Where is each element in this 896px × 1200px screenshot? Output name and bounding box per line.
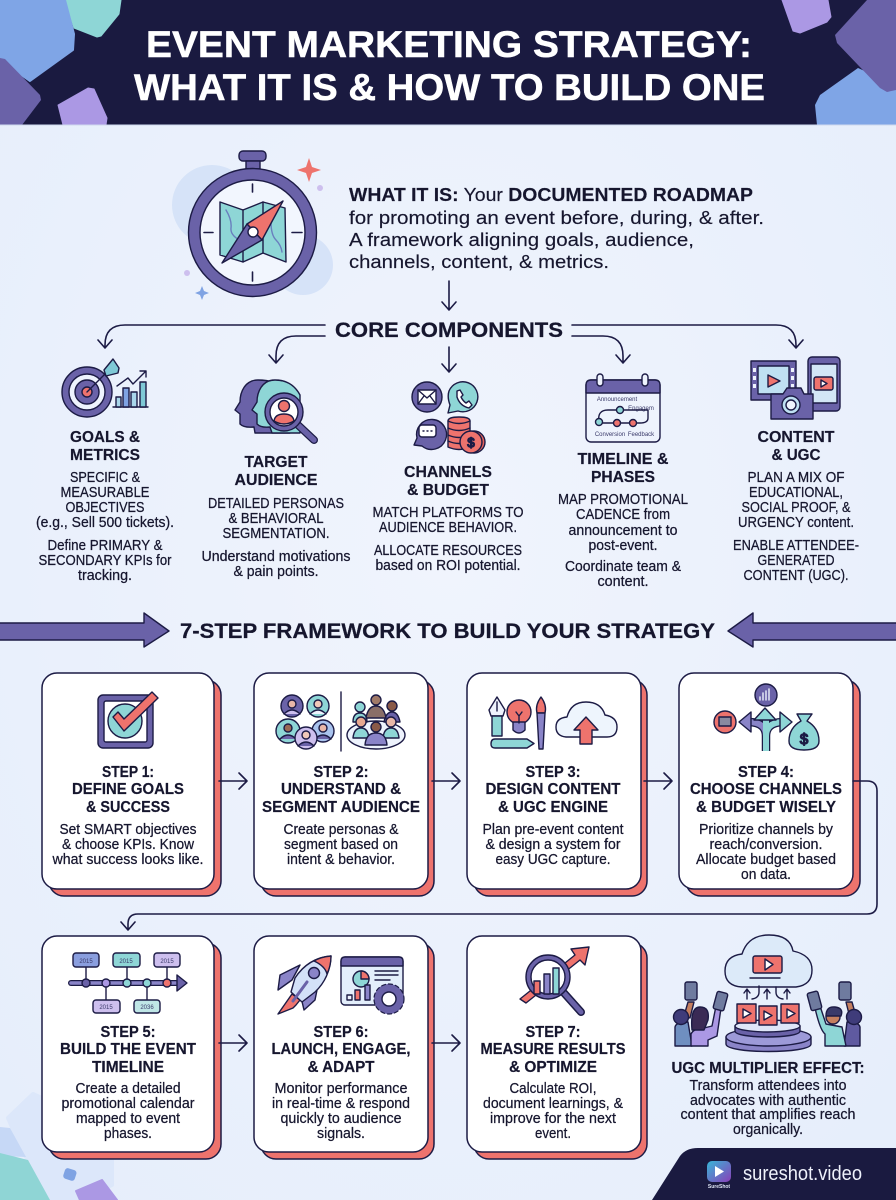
heading: 7-step framework: 7-STEP FRAMEWORK TO BUILD YOUR STRATEGY (180, 620, 715, 643)
description: & choose KPIs. Know (62, 837, 194, 853)
description: document learnings, & (483, 1096, 623, 1112)
heading: & BUDGET (407, 482, 489, 499)
description: in real-time & respond (272, 1096, 410, 1112)
description: MAP PROMOTIONAL (558, 492, 688, 508)
description (36, 470, 174, 584)
description: Plan pre-event content (482, 822, 624, 838)
description: easy UGC capture. (496, 852, 610, 868)
icon: calendar with phases: Feedback (628, 432, 655, 438)
icon: calendar with phases (586, 374, 660, 442)
panel: content and ugc (733, 357, 859, 584)
description (202, 496, 350, 580)
arrow: right banner arrow (728, 613, 896, 647)
description (482, 822, 624, 868)
arrow: intro to core components (442, 281, 456, 310)
heading: CHOOSE CHANNELS (690, 781, 842, 798)
description (696, 822, 836, 883)
description: content that amplifies reach (680, 1107, 856, 1123)
icon: personas and group (276, 692, 405, 751)
description: event. (535, 1126, 571, 1142)
icon: compass with map (172, 151, 333, 300)
heading: STEP 3: (526, 764, 580, 781)
title: WHAT IT IS & HOW TO BUILD ONE (134, 67, 765, 108)
heading: GOALS & (70, 429, 140, 446)
title (134, 24, 765, 108)
description: Set SMART objectives (60, 822, 196, 838)
description: GENERATED (758, 553, 834, 569)
heading: CHANNELS (404, 464, 492, 481)
description: Transform attendees into (690, 1078, 846, 1094)
heading (758, 429, 835, 464)
heading: TIMELINE & (578, 451, 669, 468)
heading: AUDIENCE (234, 472, 318, 489)
description: advocates with authentic (690, 1093, 846, 1109)
description: mapped to event (76, 1111, 180, 1127)
text block: what it is: WHAT IT IS: Your DOCUMENTED ROADMAP (349, 184, 753, 205)
heading (234, 454, 318, 489)
heading: TARGET (244, 454, 308, 471)
description: (e.g., Sell 500 tickets). (36, 515, 174, 531)
icon: calendar with phases: Conversion (595, 432, 625, 438)
description (272, 1081, 410, 1142)
heading (404, 464, 492, 499)
heading (272, 1024, 410, 1076)
description: SOCIAL PROOF, & (742, 500, 851, 516)
description: signals. (317, 1126, 365, 1142)
heading: UGC MULTIPLIER EFFECT: (672, 1060, 864, 1077)
panel: timeline and phases (558, 374, 688, 590)
panel: goals and metrics (36, 359, 174, 584)
description: ENABLE ATTENDEE- (733, 538, 859, 554)
description: Understand motivations (202, 549, 350, 565)
heading: STEP 2: (314, 764, 368, 781)
heading: & UGC ENGINE (498, 799, 608, 816)
description (558, 492, 688, 590)
text block: what it is: channels, content, & metrics. (349, 251, 609, 272)
heading: METRICS (70, 447, 140, 464)
heading: MEASURE RESULTS (480, 1041, 626, 1058)
heading: LAUNCH, ENGAGE, (272, 1041, 410, 1058)
description: on data. (741, 867, 791, 883)
icon: sureshot logo (707, 1161, 731, 1190)
heading: & BUDGET WISELY (696, 799, 836, 816)
description: improve for the next (490, 1111, 616, 1127)
description: segment based on (284, 837, 398, 853)
arrows: row one connectors (121, 773, 877, 930)
heading: & ADAPT (308, 1059, 375, 1076)
panel: step 5 (42, 936, 221, 1159)
heading (486, 764, 621, 816)
description (372, 505, 524, 574)
description: & design a system for (486, 837, 621, 853)
icon: timeline: 2036 (140, 1005, 154, 1011)
panel: ugc multiplier effect (672, 935, 864, 1138)
icon: heads and magnifier (235, 380, 314, 440)
heading (690, 764, 842, 816)
heading: & UGC (772, 447, 821, 464)
heading: core components: CORE COMPONENTS (335, 319, 563, 342)
description: MATCH PLATFORMS TO (372, 505, 524, 521)
header banner (0, 0, 896, 125)
heading (578, 451, 669, 486)
arrows: row two connectors (219, 1035, 460, 1051)
heading: STEP 7: (526, 1024, 580, 1041)
icon: branching arrows and money: $ (800, 731, 809, 748)
heading: DESIGN CONTENT (486, 781, 621, 798)
heading: STEP 6: (314, 1024, 368, 1041)
description: announcement to (568, 523, 678, 539)
icon: target and chart (62, 359, 148, 417)
description: ALLOCATE RESOURCES (374, 543, 522, 559)
description: SEGMENTATION. (222, 526, 330, 542)
description (733, 470, 859, 584)
icon: channels and coins (412, 382, 485, 453)
description: post-event. (588, 538, 658, 554)
description: MEASURABLE (60, 485, 150, 501)
icon: timeline: 2015 (119, 959, 133, 965)
description: promotional calendar (62, 1096, 195, 1112)
description (483, 1081, 623, 1142)
description: quickly to audience (280, 1111, 402, 1127)
heading: TIMELINE (92, 1059, 164, 1076)
description: Define PRIMARY & (48, 538, 163, 554)
arrows: core components connectors (98, 325, 803, 372)
description: PLAN A MIX OF (748, 470, 845, 486)
panel: step 2 (254, 673, 434, 896)
icon: timeline: 2015 (99, 1005, 113, 1011)
heading: STEP 5: (100, 1024, 156, 1041)
text block: what it is: A framework aligning goals, audience, (349, 229, 694, 250)
icon: timeline (71, 953, 187, 1013)
description: based on ROI potential. (376, 558, 520, 574)
decorative shapes bottom left (0, 1094, 117, 1200)
panel: step 7 (467, 936, 647, 1159)
heading (262, 764, 420, 816)
description: Create personas & (284, 822, 399, 838)
description: tracking. (78, 568, 132, 584)
icon: checkbox (98, 692, 158, 748)
heading: PHASES (591, 469, 655, 486)
panel: step 6 (254, 936, 434, 1159)
description: phases. (104, 1126, 152, 1142)
description: CONTENT (UGC). (744, 568, 848, 584)
heading: STEP 1: (102, 764, 154, 781)
brand name: sureshot.video (743, 1163, 862, 1185)
description: DETAILED PERSONAS (208, 496, 344, 512)
panel: step 3 (467, 673, 647, 896)
description: & pain points. (234, 564, 318, 580)
icon: rocket and dashboard (278, 956, 404, 1014)
description (680, 1078, 856, 1138)
description (62, 1081, 195, 1142)
description (52, 822, 203, 868)
icon: ugc cloud, platform, people (674, 935, 862, 1052)
description: Monitor performance (274, 1081, 408, 1097)
description: organically. (733, 1122, 803, 1138)
heading (70, 429, 140, 464)
description: OBJECTIVES (66, 500, 144, 516)
text block: what it is: for promoting an event before, during, & after. (349, 207, 764, 228)
heading (480, 1024, 626, 1076)
panel: channels and budget (372, 382, 524, 574)
description: Coordinate team & (565, 559, 681, 575)
description: SPECIFIC & (70, 470, 140, 486)
icon: channels and coins: $ (467, 435, 475, 450)
icon: calendar with phases: Engagem (628, 406, 654, 412)
footer: brand bar (652, 1148, 896, 1200)
description: & BEHAVIORAL (228, 511, 324, 527)
description: AUDIENCE BEHAVIOR. (379, 520, 517, 536)
heading: BUILD THE EVENT (60, 1041, 196, 1058)
icon: creative tools and cloud (489, 697, 617, 749)
description: Prioritize channels by (699, 822, 834, 838)
description: intent & behavior. (287, 852, 395, 868)
icon: calendar with phases: Announcement (597, 397, 638, 403)
icon: magnifier with growth chart (520, 947, 589, 1012)
description: Create a detailed (76, 1081, 180, 1097)
heading: SEGMENT AUDIENCE (262, 799, 420, 816)
description: CADENCE from (576, 507, 670, 523)
description: reach/conversion. (710, 837, 822, 853)
heading (72, 764, 184, 816)
heading: CONTENT (758, 429, 835, 446)
description: content. (598, 574, 648, 590)
heading: DEFINE GOALS (72, 781, 184, 798)
panel: target audience (202, 380, 350, 580)
title: EVENT MARKETING STRATEGY: (146, 24, 752, 65)
description: EDUCATIONAL, (749, 485, 843, 501)
description: SECONDARY KPIs for (38, 553, 172, 569)
heading: & SUCCESS (86, 799, 170, 816)
description: Allocate budget based (696, 852, 836, 868)
heading (60, 1024, 196, 1076)
icon: branching arrows and money (714, 684, 819, 751)
description: what success looks like. (52, 852, 203, 868)
description: URGENCY content. (738, 515, 854, 531)
heading: STEP 4: (738, 764, 794, 781)
icon: film, camera, phone (751, 357, 840, 419)
heading: & OPTIMIZE (509, 1059, 597, 1076)
icon: sureshot logo: SureShot (708, 1184, 730, 1190)
description: Calculate ROI, (510, 1081, 596, 1097)
panel: step 4 (679, 673, 860, 896)
description (284, 822, 399, 868)
heading: UNDERSTAND & (281, 781, 401, 798)
text block: what it is (349, 184, 764, 272)
panel: step 1 (42, 673, 221, 896)
arrow: left banner arrow (0, 613, 169, 647)
icon: timeline: 2015 (160, 959, 174, 965)
icon: timeline: 2015 (79, 959, 93, 965)
